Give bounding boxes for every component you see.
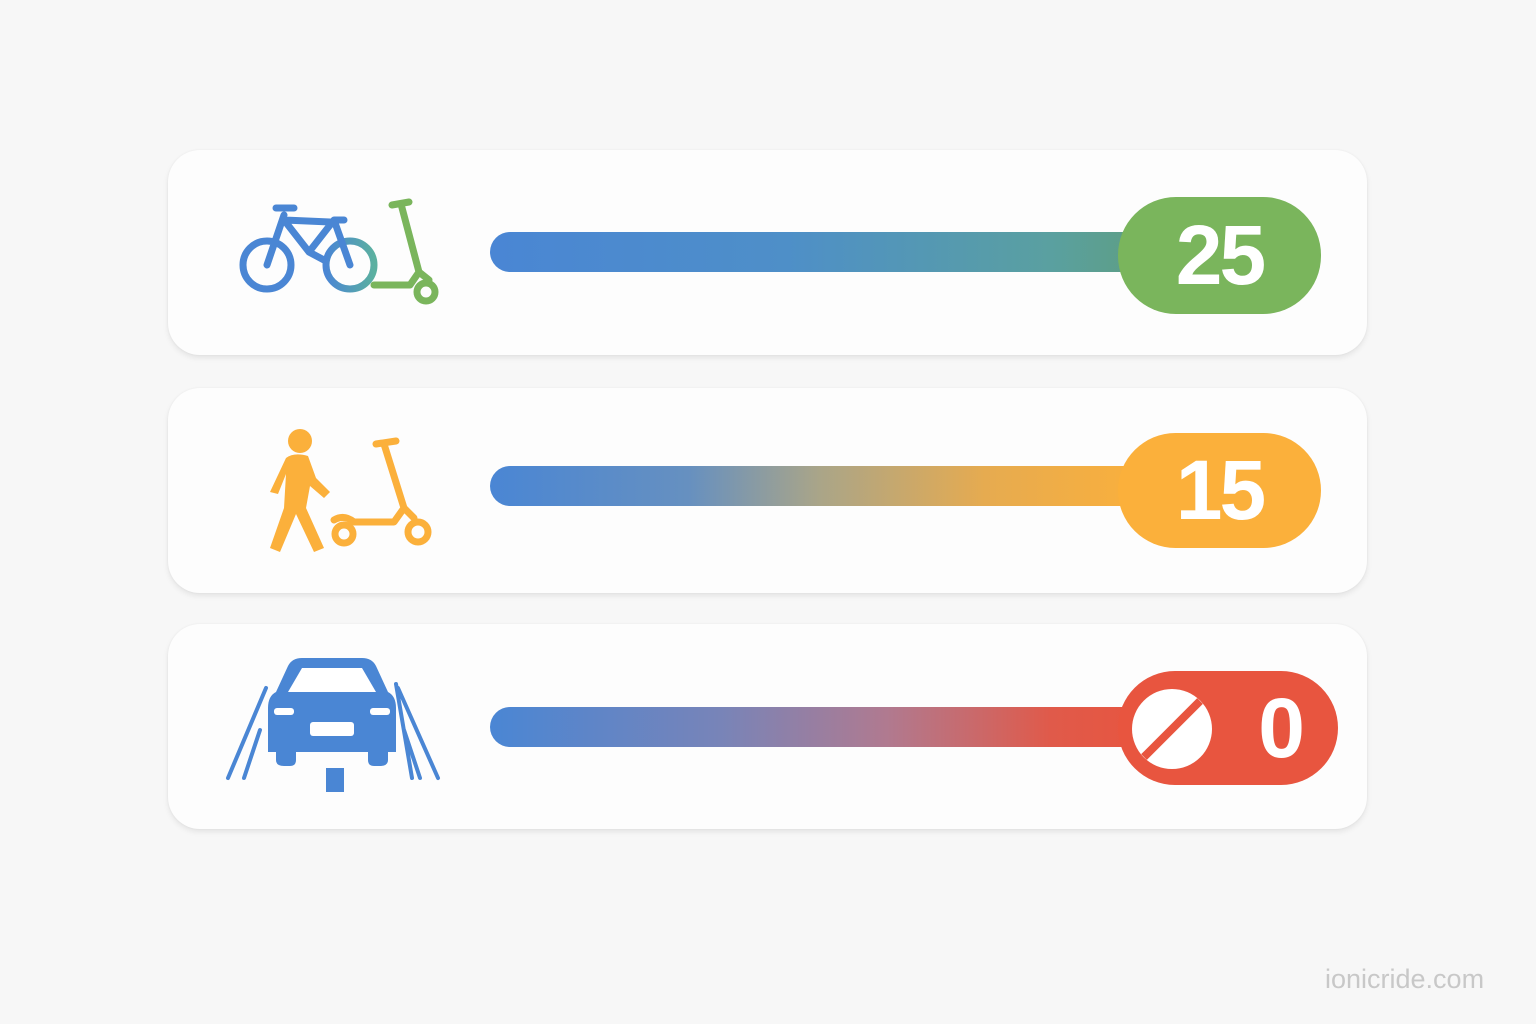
watermark: ionicride.com	[1325, 964, 1484, 994]
badge: 25: 25	[1176, 208, 1263, 302]
badge: 0 with prohibition sign: 0	[1258, 680, 1302, 774]
icon: pedestrian and scooter	[270, 429, 432, 552]
bar: gradient blue to red	[490, 707, 1150, 747]
panel: row 3 cars	[168, 624, 1367, 829]
icon: bicycle and scooter	[240, 198, 438, 304]
panel: row 1 bikes and scooters	[168, 150, 1367, 355]
bar: gradient blue to orange	[490, 466, 1150, 506]
badge: 0 with prohibition sign	[1118, 671, 1338, 785]
panel: row 2 pedestrians and scooters	[168, 388, 1367, 593]
badge: 15: 15	[1176, 443, 1263, 537]
bar: gradient blue to green	[490, 232, 1150, 272]
badge: 25	[1118, 197, 1321, 314]
icon: prohibition	[1132, 689, 1212, 769]
icon: car on road	[226, 658, 440, 792]
badge: 15	[1118, 433, 1321, 548]
